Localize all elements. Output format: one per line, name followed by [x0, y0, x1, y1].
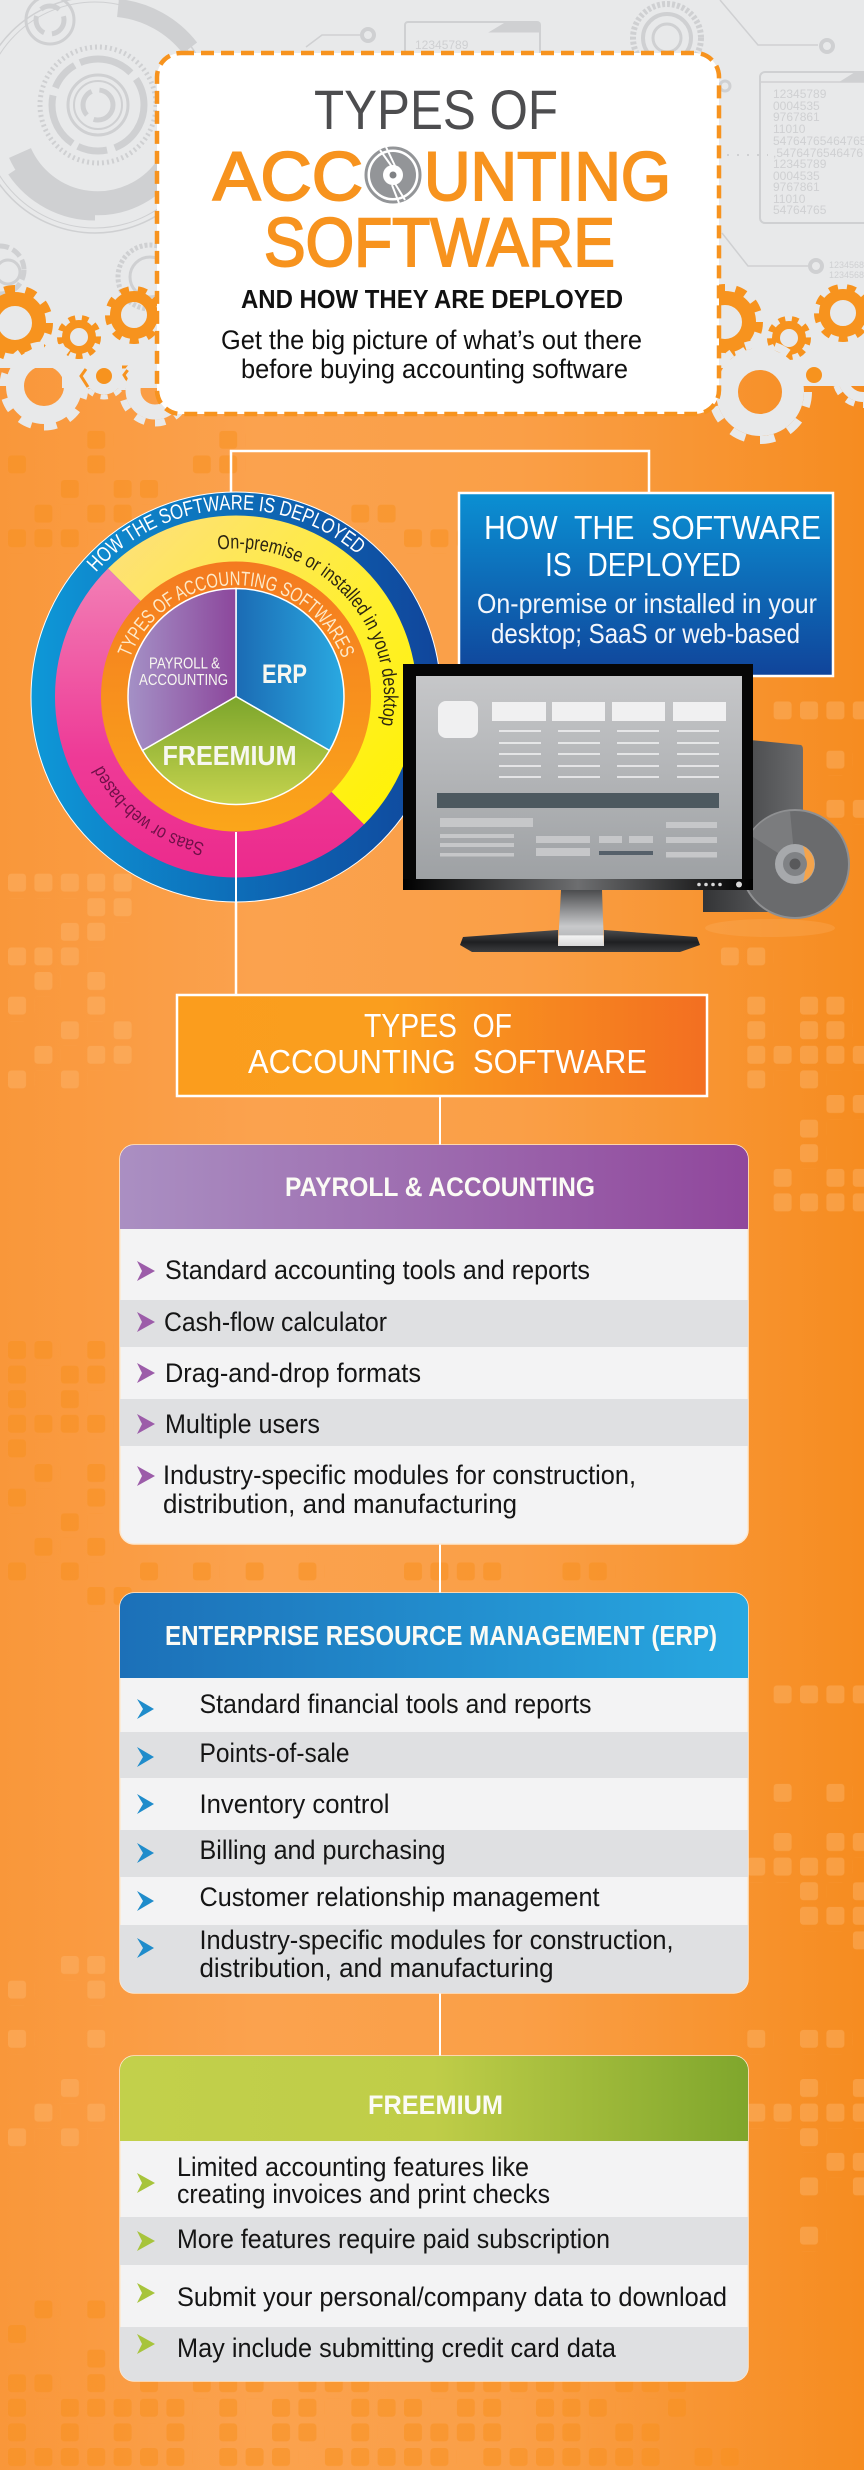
computer tower and disc — [703, 740, 849, 937]
payroll list — [163, 1255, 636, 1519]
ERP list: Industry-specific modules for construction, — [200, 1925, 674, 1955]
blue panel heading — [484, 509, 821, 583]
intro text: before buying accounting software — [241, 354, 628, 384]
heading: accounting software — [213, 138, 671, 281]
circuit number text: 9767861 — [773, 110, 820, 124]
orange ring — [101, 562, 371, 832]
payroll list: Industry-specific modules for construction, — [163, 1460, 636, 1490]
ERP list — [200, 1689, 674, 1983]
subheading: AND HOW THEY ARE DEPLOYED — [241, 284, 623, 314]
left gears — [0, 289, 188, 427]
panel: freemium — [120, 2056, 748, 2381]
types heading — [248, 1007, 647, 1080]
heading: types of: TYPES OF — [314, 78, 558, 141]
screen dark bar — [437, 793, 719, 808]
freemium chevrons — [137, 2173, 155, 2354]
computer tower — [703, 740, 803, 912]
title card — [157, 53, 719, 414]
types heading: ACCOUNTING SOFTWARE — [248, 1043, 647, 1080]
freemium list: Submit your personal/company data to download — [177, 2282, 727, 2312]
circuit number text: 54764765 — [773, 203, 827, 217]
computer monitor — [403, 664, 753, 952]
circuit number text: 1234568 — [829, 260, 864, 270]
screen form — [440, 818, 717, 858]
circuit number text: 0004535 — [773, 169, 820, 183]
freemium list — [177, 2152, 727, 2363]
blue panel: how the software is deployed — [459, 493, 833, 676]
ERP list: distribution, and manufacturing — [200, 1953, 554, 1983]
pie labels: PAYROLL & — [149, 656, 220, 672]
ERP list: Points-of-sale — [200, 1738, 350, 1768]
ring label: on-premise: On-premise or installed in your desktop — [218, 535, 399, 726]
screen lines — [499, 731, 719, 777]
intro text: Get the big picture of what’s out there — [221, 325, 642, 355]
ring label: how the software is deployed: HOW THE SOFTWARE IS DEPLOYED — [86, 495, 364, 572]
circuit number text: 12345789 — [415, 38, 469, 52]
blue panel heading: IS DEPLOYED — [545, 546, 741, 583]
pie labels: ERP — [262, 659, 307, 689]
yellow sector: on-premise — [108, 515, 417, 824]
blue panel body — [477, 588, 817, 649]
freemium list: More features require paid subscription — [177, 2224, 610, 2254]
panel: types of accounting software — [177, 995, 707, 1096]
circuit number text: 11010 — [773, 192, 806, 206]
reflection — [705, 919, 835, 937]
monitor base — [460, 930, 700, 952]
blue panel body: On-premise or installed in your — [477, 588, 817, 619]
monitor screen — [416, 676, 742, 879]
payroll chevrons — [137, 1261, 155, 1486]
monitor frame — [403, 664, 753, 890]
vertical hairline — [235, 832, 237, 902]
payroll list: Cash-flow calculator — [164, 1307, 387, 1337]
gears — [0, 287, 864, 440]
icon: cd disc — [741, 810, 849, 918]
circuit number text: 9767861 — [773, 180, 820, 194]
pie labels — [139, 656, 307, 771]
freemium list: creating invoices and print checks — [177, 2179, 550, 2209]
ring label: types of accounting softwares: TYPES OF ACCOUNTING SOFTWARES — [117, 571, 354, 657]
blue panel body: desktop; SaaS or web-based — [491, 618, 800, 649]
ERP list: Standard financial tools and reports — [200, 1689, 592, 1719]
left circuit dial decoration — [0, 0, 213, 309]
connector lines — [231, 451, 649, 995]
icon: disc in title — [366, 147, 420, 203]
heading: accounting software: ACC — [213, 138, 363, 215]
payroll list: Multiple users — [165, 1409, 320, 1439]
ERP header text: ENTERPRISE RESOURCE MANAGEMENT (ERP) — [165, 1620, 717, 1651]
freemium list: May include submitting credit card data — [177, 2333, 616, 2363]
ERP list: Customer relationship management — [200, 1882, 600, 1912]
circuit number text: 11010 — [773, 122, 806, 136]
heading: accounting software: UNTING — [424, 138, 671, 215]
freemium header text: FREEMIUM — [368, 2090, 503, 2120]
intro text — [221, 325, 642, 384]
payroll header text: PAYROLL & ACCOUNTING — [285, 1172, 595, 1202]
ERP list: Billing and purchasing — [200, 1835, 446, 1865]
pie: freemium — [142, 696, 330, 804]
outer blue ring — [31, 492, 441, 902]
pink sector: SaaS — [55, 568, 364, 878]
circuit number text: 12345789 — [773, 87, 827, 101]
ERP list: Inventory control — [200, 1789, 390, 1819]
heading: accounting software: SOFTWARE — [264, 204, 615, 281]
screen blocks — [438, 701, 726, 738]
pie: ERP — [236, 588, 344, 750]
circuit number text: 12345789 — [773, 157, 827, 171]
circular diagram — [30, 492, 439, 902]
ring label: SaaS: Saas or web-based — [91, 766, 204, 856]
right gears — [691, 287, 864, 440]
monitor stand — [558, 890, 604, 946]
circuit number text — [415, 38, 864, 280]
payroll list: Standard accounting tools and reports — [165, 1255, 590, 1285]
ERP chevrons — [137, 1699, 154, 1958]
circuit number text: 1234568 — [829, 270, 864, 280]
pie labels: ACCOUNTING — [139, 672, 228, 689]
grey circuit header background — [0, 0, 864, 388]
monitor buttons — [697, 882, 742, 888]
payroll list: distribution, and manufacturing — [163, 1489, 517, 1519]
types heading: TYPES OF — [364, 1007, 512, 1044]
connectors between panels — [439, 1096, 441, 2056]
blue panel heading: HOW THE SOFTWARE — [484, 509, 821, 546]
circuit number text: 0004535 — [773, 99, 820, 113]
pie labels: FREEMIUM — [162, 740, 296, 771]
pie: payroll and accounting — [128, 588, 236, 750]
freemium list: Limited accounting features like — [177, 2152, 529, 2182]
right circuit decoration — [306, 0, 864, 272]
payroll list: Drag-and-drop formats — [165, 1358, 421, 1388]
panel: enterprise resource management — [120, 1593, 748, 1993]
panel: payroll and accounting — [120, 1145, 748, 1544]
